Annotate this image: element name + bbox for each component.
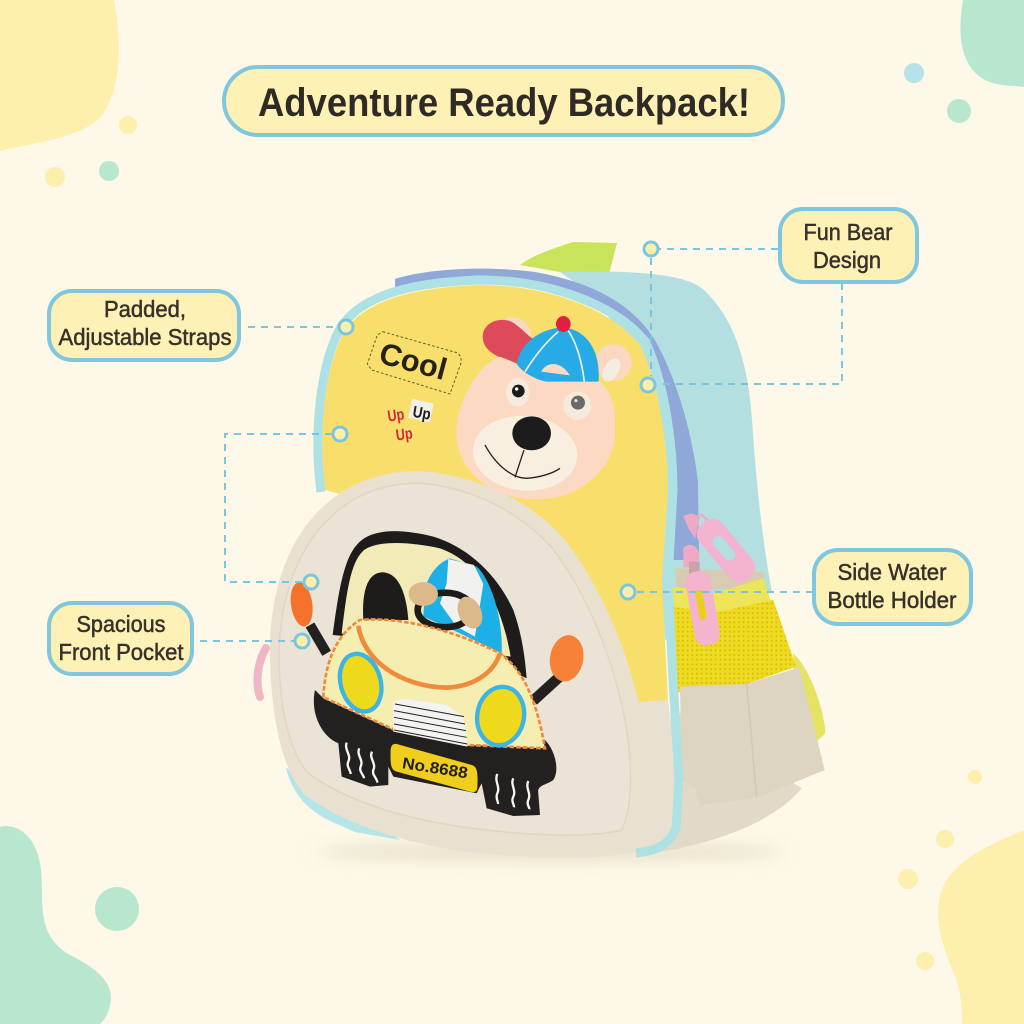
up stickers: Up (387, 406, 406, 426)
leader: bear design (641, 242, 842, 392)
callout: side water bottle holder (814, 550, 971, 624)
light blue piping (318, 280, 679, 853)
callout: side water bottle holder: Bottle Holder (828, 587, 957, 613)
side pocket and bottom (640, 568, 825, 855)
left zipper pull (258, 648, 266, 697)
mesh band (670, 578, 771, 612)
headlights (334, 649, 388, 716)
bottom blue edge (286, 768, 400, 840)
windshield arc (358, 626, 500, 688)
background blob: bottom-left green (0, 826, 111, 1024)
mouth (485, 445, 560, 478)
muzzle (470, 412, 580, 495)
backpack illustration (258, 242, 825, 860)
title: Adventure Ready Backpack! (258, 81, 750, 125)
license plate: No.8688 (401, 755, 469, 782)
cool patch (367, 332, 461, 394)
callout: spacious front pocket: Spacious (76, 611, 166, 637)
callout: padded adjustable straps: Adjustable Straps (58, 324, 232, 350)
callout: fun bear design (780, 209, 917, 282)
zipper band (395, 269, 699, 560)
callout: side water bottle holder: Side Water (838, 559, 947, 585)
zipper pulls (683, 513, 760, 647)
car body (323, 619, 545, 748)
cap brim (483, 320, 533, 366)
side panel (560, 272, 772, 640)
front pocket (270, 471, 648, 858)
cool patch: Cool (376, 336, 450, 387)
mirrors (288, 581, 587, 701)
nose (512, 416, 551, 450)
up stickers: Up (395, 425, 414, 445)
top carry handle (520, 242, 617, 278)
bear head (456, 357, 615, 499)
tyre treads (346, 743, 529, 809)
yellow front panel (322, 285, 668, 710)
ground shadow (315, 844, 785, 860)
bear graphic (367, 316, 632, 499)
ears (505, 317, 632, 385)
eyes (512, 385, 525, 397)
background blob: bottom-right yellow (938, 830, 1024, 1024)
callout: padded adjustable straps (49, 291, 239, 360)
leader: straps (248, 320, 353, 334)
up stickers (387, 399, 434, 445)
eye patches (506, 378, 529, 407)
background blob: top-right green (960, 0, 1024, 87)
callout: spacious front pocket: Front Pocket (58, 639, 184, 665)
leader: water bottle holder (621, 585, 813, 599)
leader: front pocket (200, 634, 309, 648)
leader: front pocket upper elbow (225, 427, 347, 589)
callout: padded adjustable straps: Padded, (104, 296, 186, 322)
yellow strap (793, 653, 825, 742)
bumper and wheels (314, 690, 556, 816)
driver head (363, 572, 408, 620)
cabin (342, 543, 511, 657)
background blob: top-left yellow (0, 0, 119, 151)
hands (409, 582, 438, 606)
base (640, 713, 802, 855)
upper pull (683, 513, 760, 588)
license plate (391, 744, 478, 792)
grille (393, 699, 467, 747)
callout: spacious front pocket (49, 603, 192, 674)
callout: fun bear design: Fun Bear (804, 219, 893, 245)
steering wheel (418, 593, 472, 627)
roof (333, 531, 527, 678)
up stickers: Up (411, 404, 432, 424)
title (224, 67, 783, 135)
beige trim (675, 568, 765, 592)
callout: fun bear design: Design (813, 247, 881, 273)
cap (517, 316, 599, 382)
lower pull (683, 545, 722, 647)
car graphic (288, 531, 587, 816)
driver striped figure (423, 558, 502, 653)
front flap (680, 667, 825, 806)
lower front panel (600, 700, 679, 852)
mesh pocket (670, 600, 796, 693)
